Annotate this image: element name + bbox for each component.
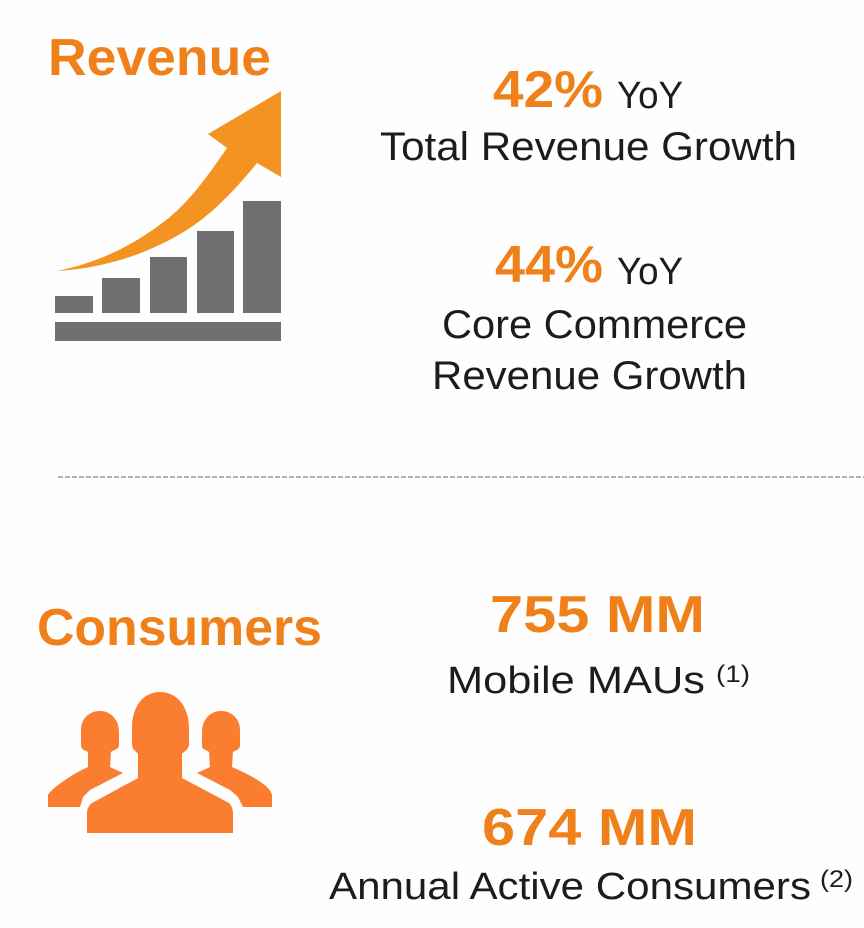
heading: Consumers: Consumers [37, 599, 322, 657]
centre person [87, 692, 233, 833]
stat: 44% YoY: 44% [495, 236, 603, 294]
stat: 674 MM: 674 MM [482, 799, 697, 857]
text: Annual Active Consumers (2): Annual Active Consumers [329, 866, 811, 908]
text: Core Commerce Revenue Growth: Core Commerce [442, 303, 747, 347]
text: Total Revenue Growth: Total Revenue Growth [380, 125, 797, 169]
text: Mobile MAUs (1): (1) [716, 661, 750, 688]
icon: group of three people [48, 692, 272, 833]
text: Annual Active Consumers (2): (2) [820, 866, 853, 893]
right person [197, 711, 272, 807]
text: Mobile MAUs (1): Mobile MAUs [447, 660, 705, 702]
rising arrow [57, 91, 281, 271]
chart bars [55, 201, 281, 341]
stat: 44% YoY [495, 236, 683, 294]
stat: 755 MM: 755 MM [490, 586, 705, 644]
stat: 42% YoY [493, 61, 683, 119]
left person [48, 711, 123, 807]
text: Core Commerce Revenue Growth [432, 303, 747, 398]
text: Core Commerce Revenue Growth: Revenue Growth [432, 354, 747, 398]
stat: 42% YoY: 42% [493, 61, 603, 119]
heading: Revenue: Revenue [48, 29, 271, 87]
icon: revenue bar chart with rising arrow [55, 91, 281, 341]
stat: 42% YoY: YoY [617, 75, 683, 117]
stat: 44% YoY: YoY [617, 251, 683, 293]
